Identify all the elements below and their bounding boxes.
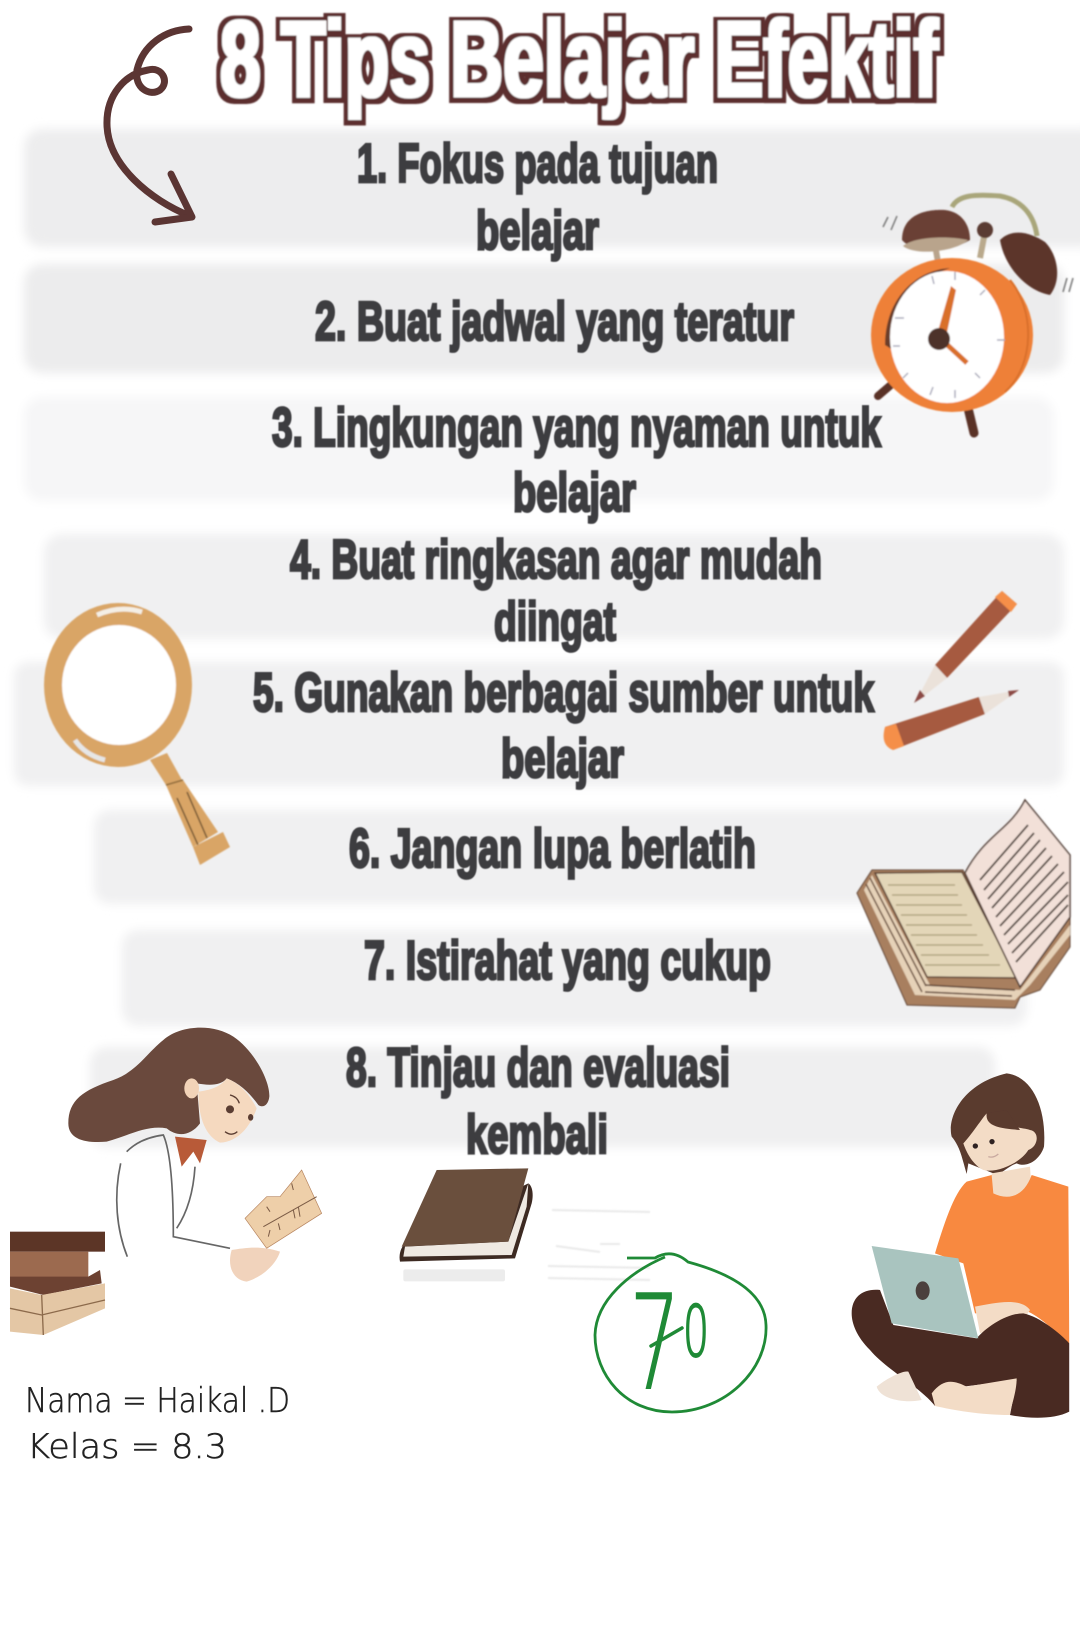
handwritten name and class xyxy=(25,1381,290,1467)
tip 3: belajar xyxy=(513,461,636,523)
tip 1: 1. Fokus pada tujuan xyxy=(357,132,718,194)
tip 4: diingat xyxy=(494,590,616,652)
handwritten name and class: Kelas = 8.3 xyxy=(27,1427,227,1467)
score circle 70: 7 xyxy=(630,1267,680,1419)
tip 5: belajar xyxy=(501,727,624,789)
icon: closed book xyxy=(400,1168,533,1281)
tip 8: 8. Tinjau dan evaluasi xyxy=(346,1036,730,1098)
tip 1: belajar xyxy=(476,199,599,261)
tip 8 xyxy=(346,1036,730,1165)
icon: alarm clock xyxy=(871,195,1073,433)
background bands behind tips xyxy=(14,129,1080,1147)
tip 3 xyxy=(272,396,881,523)
tip 4 xyxy=(290,528,822,652)
tip 5 xyxy=(253,661,874,789)
tip 4: 4. Buat ringkasan agar mudah xyxy=(290,528,822,590)
score circle 70: 0 xyxy=(683,1291,709,1373)
icon: open book xyxy=(857,800,1070,1008)
icon: two pencils xyxy=(884,591,1019,750)
tip 6: 6. Jangan lupa berlatih xyxy=(349,817,756,879)
icon: stack of books xyxy=(10,1232,105,1335)
illustration: person with laptop xyxy=(852,1073,1069,1418)
tip 8: kembali xyxy=(466,1103,608,1165)
icon: magnifying glass xyxy=(44,603,230,865)
tip 7: 7. Istirahat yang cukup xyxy=(364,929,771,991)
faint ghost of a second book xyxy=(548,1210,650,1280)
tip 1 xyxy=(357,132,718,261)
tip 2: 2. Buat jadwal yang teratur xyxy=(315,290,794,352)
icon: curly arrow xyxy=(107,29,192,222)
score circle 70 xyxy=(595,1254,766,1419)
illustration: girl reading a book xyxy=(68,1028,322,1282)
handwritten name and class: Nama = Haikal .D xyxy=(25,1381,290,1421)
